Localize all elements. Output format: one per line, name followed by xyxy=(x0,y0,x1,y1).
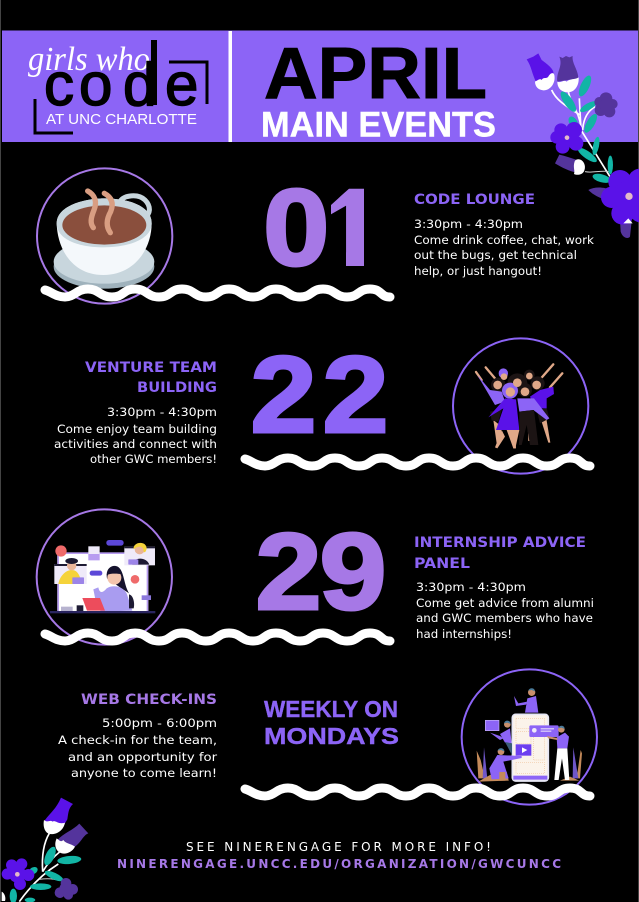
text: Internship Advice Panel details xyxy=(414,535,594,641)
icon: group of women in circle xyxy=(453,338,588,474)
text: Venture Team Building details: Come enjoy team building xyxy=(57,422,217,436)
text: Internship Advice Panel details: PANEL xyxy=(414,556,470,572)
text: Code Lounge details: Come drink coffee, chat, work xyxy=(414,233,594,247)
logo: girls who code at UNC Charlotte: AT UNC CHARLOTTE xyxy=(46,111,197,128)
text: Venture Team Building details: VENTURE TEAM xyxy=(85,360,217,376)
text: Internship Advice Panel details: and GWC members who have xyxy=(416,611,593,625)
header band xyxy=(2,30,638,142)
date: 29: 2 xyxy=(256,511,322,633)
icon: flower branch bottom left xyxy=(2,798,88,902)
text: Internship Advice Panel details: 3:30pm - 4:30pm xyxy=(416,580,526,594)
event: Internship Advice Panel xyxy=(37,509,594,645)
text: Code Lounge details xyxy=(414,192,594,278)
heading: Weekly on Mondays xyxy=(264,696,399,749)
text: Internship Advice Panel details: Come get advice from alumni xyxy=(416,596,594,610)
icon: team building a mobile app in circle xyxy=(462,669,597,805)
text: Web Check-Ins details: anyone to come learn! xyxy=(71,766,217,780)
event: Code Lounge xyxy=(37,167,594,304)
text: Code Lounge details: 3:30pm - 4:30pm xyxy=(414,217,523,231)
date: 01: 1 xyxy=(320,167,386,289)
date: 22: 2 xyxy=(322,334,388,456)
text: Venture Team Building details: activities and connect with xyxy=(54,437,217,451)
text: Web Check-Ins details xyxy=(58,692,217,780)
text: Web Check-Ins details: 5:00pm - 6:00pm xyxy=(102,716,217,730)
text: Web Check-Ins details: A check-in for the team, xyxy=(58,733,217,747)
footer: more info: NINERENGAGE.UNCC.EDU/ORGANIZATION/GWCUNCC xyxy=(117,857,561,871)
heading: Weekly on Mondays: WEEKLY ON xyxy=(264,696,398,722)
icon: coffee cup in circle xyxy=(37,168,172,304)
text: Code Lounge details: out the bugs, get technical xyxy=(414,248,577,262)
footer: more info: SEE NINERENGAGE FOR MORE INFO! xyxy=(186,840,491,854)
text: Code Lounge details: help, or just hangout! xyxy=(414,264,542,278)
text: Internship Advice Panel details: had internships! xyxy=(416,627,512,641)
title: April: APRIL xyxy=(264,34,487,114)
text: Internship Advice Panel details: INTERNSHIP ADVICE xyxy=(414,535,586,551)
text: Venture Team Building details xyxy=(54,360,217,466)
logo: girls who code at UNC Charlotte: code xyxy=(44,51,198,118)
footer: more info xyxy=(117,840,561,871)
icon: flower branch top right xyxy=(527,53,639,238)
text: Code Lounge details: CODE LOUNGE xyxy=(414,192,535,208)
date: 01 xyxy=(266,188,364,268)
logo: girls who code at UNC Charlotte: girls who xyxy=(28,41,150,78)
text: Web Check-Ins details: and an opportunity for xyxy=(68,750,217,764)
text: Web Check-Ins details: WEB CHECK-INS xyxy=(81,692,217,708)
text: Venture Team Building details: BUILDING xyxy=(137,380,217,396)
date: 01: 0 xyxy=(263,167,329,289)
date: 22 xyxy=(250,334,388,456)
logo: girls who code at UNC Charlotte xyxy=(28,40,207,133)
icon: video meeting in circle xyxy=(37,509,172,645)
subtitle: Main Events: MAIN EVENTS xyxy=(261,106,496,144)
text: Venture Team Building details: other GWC members! xyxy=(90,452,217,466)
text: Venture Team Building details: 3:30pm - 4:30pm xyxy=(107,405,217,419)
date: 29: 9 xyxy=(320,511,386,633)
heading: Weekly on Mondays: MONDAYS xyxy=(264,723,399,749)
event: Venture Team Building xyxy=(54,334,590,474)
event: Web Check-Ins xyxy=(58,669,597,805)
date: 22: 2 xyxy=(250,334,316,456)
date: 29 xyxy=(256,511,386,633)
